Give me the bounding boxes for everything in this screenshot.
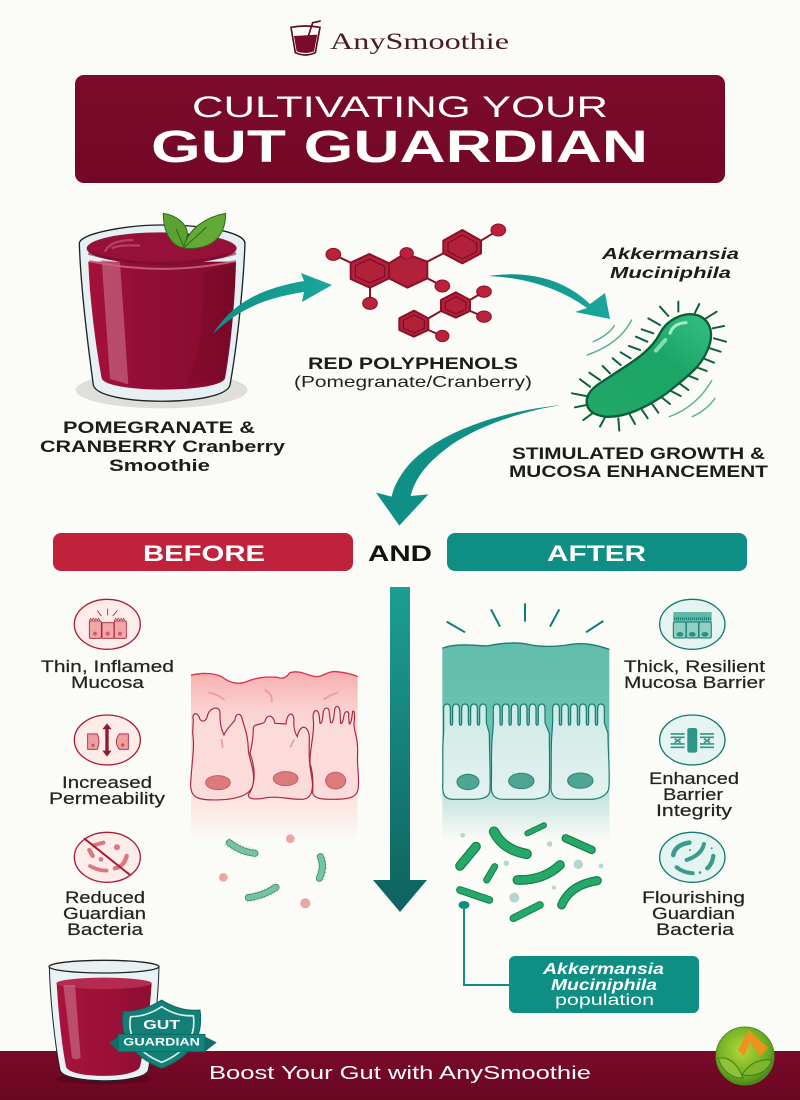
icon: increased permeability <box>74 715 140 765</box>
icon: thick mucosa barrier <box>660 599 725 649</box>
label: flourishing guardian bacteria: Flourishing <box>642 888 745 907</box>
label: thin inflamed mucosa <box>41 657 174 692</box>
label: Akkermansia Muciniphila <box>601 246 739 282</box>
label: flourishing guardian bacteria <box>642 888 745 939</box>
heading pill: before <box>53 533 353 571</box>
label: red polyphenols <box>294 354 532 391</box>
title banner: CULTIVATING YOUR <box>192 91 608 124</box>
label: thin inflamed mucosa: Mucosa <box>71 673 145 692</box>
heading pill: after: AFTER <box>547 541 646 566</box>
label: Akkermansia Muciniphila: Akkermansia <box>601 246 739 263</box>
arrow: bacterium to comparison <box>376 405 562 526</box>
label: thick mucosa barrier: Thick, Resilient <box>624 657 765 676</box>
label: increased permeability: Increased <box>62 773 152 792</box>
arrow: central downward <box>373 587 427 912</box>
badge: gut guardian shield: GUARDIAN <box>123 1037 200 1049</box>
callout: Akkermansia population: Muciniphila <box>551 977 657 994</box>
icon: reduced guardian bacteria <box>74 832 140 882</box>
label: increased permeability: Permeability <box>49 789 166 808</box>
badge: gut guardian shield <box>109 1000 217 1068</box>
icon: enhanced barrier integrity <box>660 715 725 765</box>
label: smoothie <box>40 418 286 475</box>
label: enhanced barrier integrity: Integrity <box>656 801 733 820</box>
icon: footer leaf orb logo <box>716 1027 774 1085</box>
icon: footer smoothie glass <box>49 960 159 1084</box>
label: red polyphenols: RED POLYPHENOLS <box>308 354 518 373</box>
arrow: polyphenols to bacterium <box>488 274 610 319</box>
icon: smoothie glass with leaf <box>76 213 248 408</box>
label: stimulated growth <box>509 444 769 481</box>
callout: Akkermansia population <box>509 956 699 1013</box>
label: flourishing guardian bacteria: Guardian <box>652 904 735 923</box>
callout: leader line <box>458 901 510 985</box>
label: reduced guardian bacteria: Guardian <box>63 904 146 923</box>
logo: AnySmoothie: AnySmoothie <box>330 29 509 55</box>
panel: inflamed mucosa cells <box>191 672 359 840</box>
callout: Akkermansia population: Akkermansia <box>542 961 664 978</box>
label: Akkermansia Muciniphila: Muciniphila <box>610 265 731 282</box>
heading pill: after <box>447 533 747 571</box>
callout: Akkermansia population: population <box>555 992 654 1009</box>
icon: Akkermansia bacterium <box>572 302 726 431</box>
arrow: smoothie to polyphenols <box>213 273 332 334</box>
label: stimulated growth: MUCOSA ENHANCEMENT <box>509 462 769 481</box>
heading pill: before: BEFORE <box>143 541 265 566</box>
label: reduced guardian bacteria: Reduced <box>65 888 145 907</box>
label: thick mucosa barrier: Mucosa Barrier <box>624 673 765 692</box>
footer bar: Boost Your Gut with AnySmoothie <box>209 1063 591 1083</box>
label: reduced guardian bacteria: Bacteria <box>67 920 144 939</box>
label: enhanced barrier integrity <box>649 769 739 820</box>
title banner: GUT GUARDIAN <box>151 121 648 172</box>
label: thick mucosa barrier <box>624 657 765 692</box>
icon: polyphenol molecules <box>326 224 506 342</box>
label: flourishing guardian bacteria: Bacteria <box>656 920 735 939</box>
footer bar <box>0 1051 800 1100</box>
label: smoothie: POMEGRANATE & <box>63 418 255 437</box>
label: enhanced barrier integrity: Enhanced <box>649 769 739 788</box>
label: smoothie: CRANBERRY Cranberry <box>40 437 286 456</box>
title banner <box>75 75 725 183</box>
label: increased permeability <box>49 773 166 808</box>
icon: sparse bacteria before <box>219 834 322 908</box>
label: thin inflamed mucosa: Thin, Inflamed <box>41 657 174 676</box>
badge: gut guardian shield: GUT <box>143 1017 180 1032</box>
label: stimulated growth: STIMULATED GROWTH & <box>512 444 765 463</box>
label: reduced guardian bacteria <box>63 888 146 939</box>
logo: AnySmoothie <box>291 21 509 55</box>
panel: healthy mucosa cells <box>442 603 609 840</box>
label: red polyphenols: (Pomegranate/Cranberry) <box>294 374 532 391</box>
icon: flourishing bacteria after <box>460 825 603 918</box>
icon: thin inflamed mucosa <box>74 599 140 649</box>
icon: flourishing guardian bacteria <box>660 832 725 882</box>
heading: and: AND <box>368 541 432 566</box>
label: enhanced barrier integrity: Barrier <box>663 785 723 804</box>
label: smoothie: Smoothie <box>109 456 210 475</box>
